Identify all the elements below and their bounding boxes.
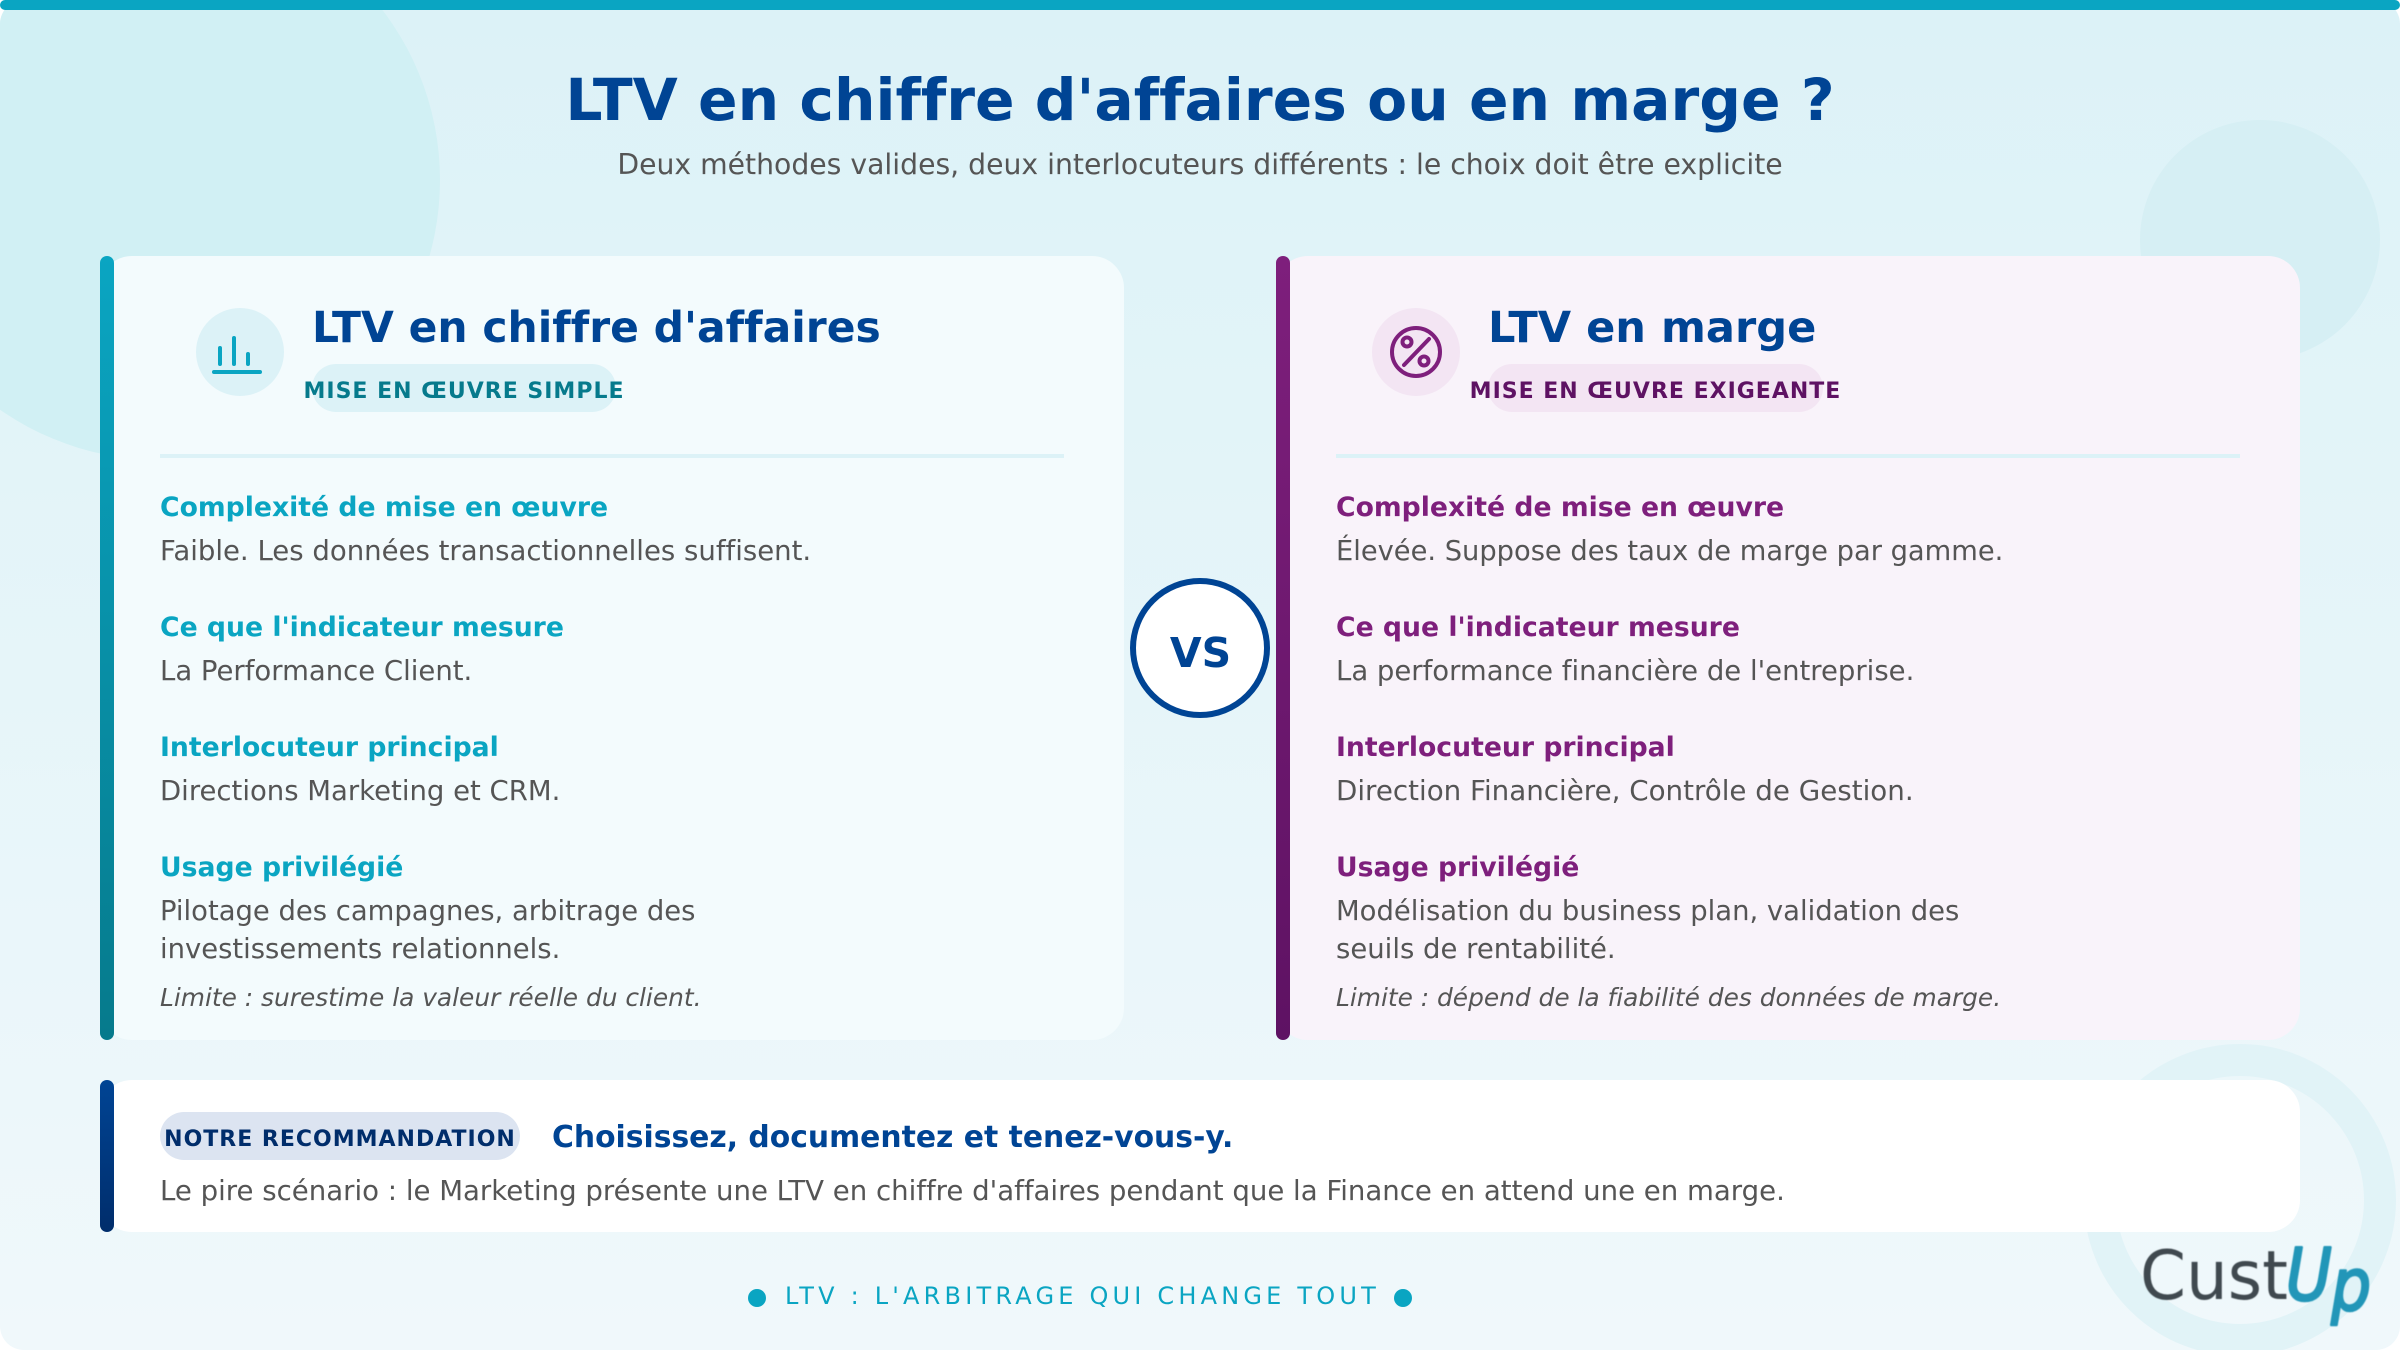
title: LTV en chiffre d'affaires ou en marge ? (565, 66, 1835, 134)
VS badge: VS (1170, 629, 1231, 677)
icon: bar chart (196, 308, 284, 396)
recommendation heading: Choisissez, documentez et tenez-vous-y. (552, 1120, 1233, 1155)
criterion: complexité (1336, 492, 2003, 567)
logo: CustUp: U (2286, 1233, 2332, 1317)
logo: CustUp: p (2330, 1243, 2371, 1327)
criterion: interlocuteur: Interlocuteur principal (160, 732, 499, 763)
criterion: usage (1336, 852, 1959, 965)
footer tagline: LTV : L'ARBITRAGE QUI CHANGE TOUT (785, 1282, 1380, 1310)
criterion: interlocuteur: Direction Financière, Contrôle de Gestion. (1336, 774, 1914, 807)
criterion: complexité: Complexité de mise en œuvre (160, 492, 608, 523)
criterion: interlocuteur (160, 732, 560, 807)
criterion: mesure: Ce que l'indicateur mesure (1336, 612, 1740, 643)
recommendation pill: NOTRE RECOMMANDATION (164, 1127, 516, 1152)
criterion: complexité: Élevée. Suppose des taux de marge par gamme. (1336, 535, 2003, 567)
panel: LTV en marge (1276, 256, 2300, 1040)
criterion: complexité: Complexité de mise en œuvre (1336, 492, 1784, 523)
logo: CustUp: Cust (2140, 1237, 2288, 1316)
badge: exigeante: MISE EN ŒUVRE EXIGEANTE (1470, 379, 1841, 404)
badge: exigeante (1470, 364, 1841, 412)
criterion: mesure: La Performance Client. (160, 655, 472, 687)
criterion: usage: investissements relationnels. (160, 934, 560, 965)
panel heading: LTV en chiffre d'affaires (312, 304, 881, 353)
panel: recommandation (100, 1080, 2300, 1232)
criterion: mesure (1336, 612, 1914, 687)
badge: simple: MISE EN ŒUVRE SIMPLE (304, 379, 624, 404)
criterion: usage: Modélisation du business plan, validation des (1336, 896, 1959, 927)
panel: LTV en chiffre d'affaires (100, 256, 1124, 1040)
criterion: usage (160, 852, 695, 965)
limit note: Limite : surestime la valeur réelle du client. (160, 983, 702, 1012)
badge: simple (304, 364, 624, 412)
panel heading: LTV en marge (1488, 303, 1816, 353)
recommendation pill (160, 1112, 520, 1160)
criterion: interlocuteur: Interlocuteur principal (1336, 732, 1675, 763)
criterion: usage: Usage privilégié (160, 852, 403, 883)
criterion: interlocuteur: Directions Marketing et CRM. (160, 775, 560, 807)
criterion: mesure: Ce que l'indicateur mesure (160, 612, 564, 643)
top accent bar (0, 0, 2400, 10)
criterion: complexité: Faible. Les données transactionnelles suffisent. (160, 535, 811, 567)
criterion: interlocuteur (1336, 732, 1914, 807)
recommendation text: Le pire scénario : le Marketing présente une LTV en chiffre d'affaires pendant que la Finance en attend une en marge. (160, 1174, 1785, 1207)
limit note: Limite : dépend de la fiabilité des données de marge. (1336, 983, 2001, 1012)
criterion: usage: Usage privilégié (1336, 852, 1579, 883)
VS badge (1133, 581, 1267, 715)
subtitle: Deux méthodes valides, deux interlocuteurs différents : le choix doit être explicite (617, 148, 1783, 181)
criterion: usage: Pilotage des campagnes, arbitrage des (160, 896, 695, 927)
icon: percent (1372, 308, 1460, 396)
criterion: mesure: La performance financière de l'entreprise. (1336, 655, 1914, 687)
criterion: usage: seuils de rentabilité. (1336, 933, 1616, 965)
criterion: mesure (160, 612, 564, 687)
logo: CustUp (2140, 1233, 2371, 1327)
criterion: complexité (160, 492, 811, 567)
